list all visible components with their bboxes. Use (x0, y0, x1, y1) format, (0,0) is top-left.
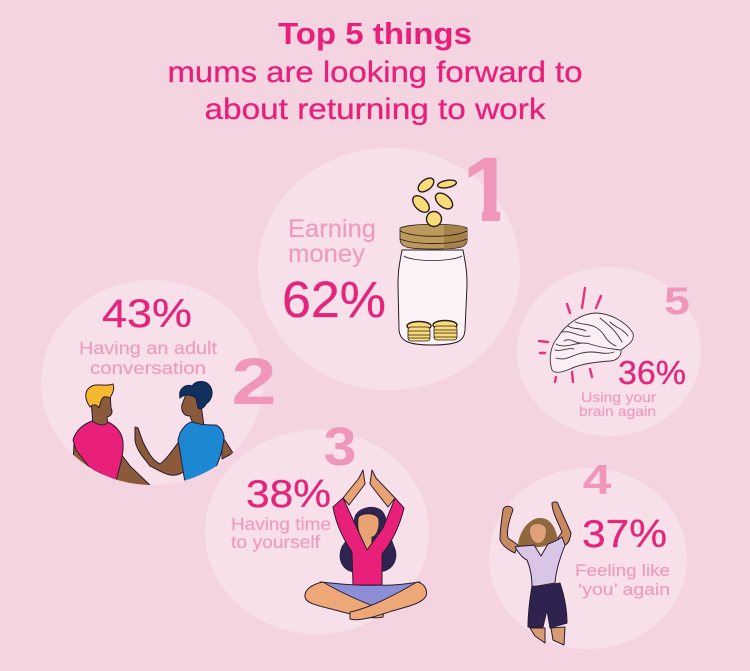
title (168, 16, 582, 126)
label: using your brain again: Using your (581, 390, 657, 405)
panel: 2 adult conversation: conversation (90, 358, 206, 378)
icon: jar with coins (398, 175, 467, 345)
icon: brain (539, 288, 633, 382)
stat: 62%: 62% (282, 271, 386, 328)
panel: 1 earning money: money (288, 240, 366, 268)
illustration: woman meditating (305, 470, 427, 620)
number 2: 2 (232, 344, 276, 418)
label: earning money: Earning (288, 215, 376, 243)
panel: 3 time to yourself: to yourself (231, 532, 320, 552)
number 1: 1 (462, 139, 514, 241)
title: about returning to work (204, 93, 547, 126)
panel: 5 using your brain: brain again (579, 404, 656, 419)
icon: two people talking (73, 382, 233, 495)
label: having an adult conversation: Having an adult (79, 338, 217, 358)
panel: 4 feeling like you: ‘you’ again (578, 580, 670, 599)
number 5: 5 (664, 280, 690, 323)
number 3: 3 (324, 417, 356, 477)
stat: 43%: 43% (102, 292, 192, 336)
panel: 2 adult conversation (41, 280, 276, 495)
panel: 4 feeling like you (489, 456, 687, 649)
panel: 3 time to yourself (205, 417, 429, 634)
title: Top 5 things (278, 16, 472, 51)
panel: 5 using your brain (517, 267, 701, 436)
stat: 36%: 36% (618, 354, 686, 391)
title: mums are looking forward to (168, 56, 582, 89)
stat: 37%: 37% (582, 513, 667, 556)
panel: 1 earning money (258, 139, 520, 390)
number 4: 4 (583, 456, 612, 503)
stat: 38%: 38% (246, 473, 331, 516)
illustration: woman celebrating (500, 502, 571, 645)
label: feeling like you again: Feeling like (575, 561, 670, 580)
label: having time to yourself: Having time (231, 514, 331, 534)
